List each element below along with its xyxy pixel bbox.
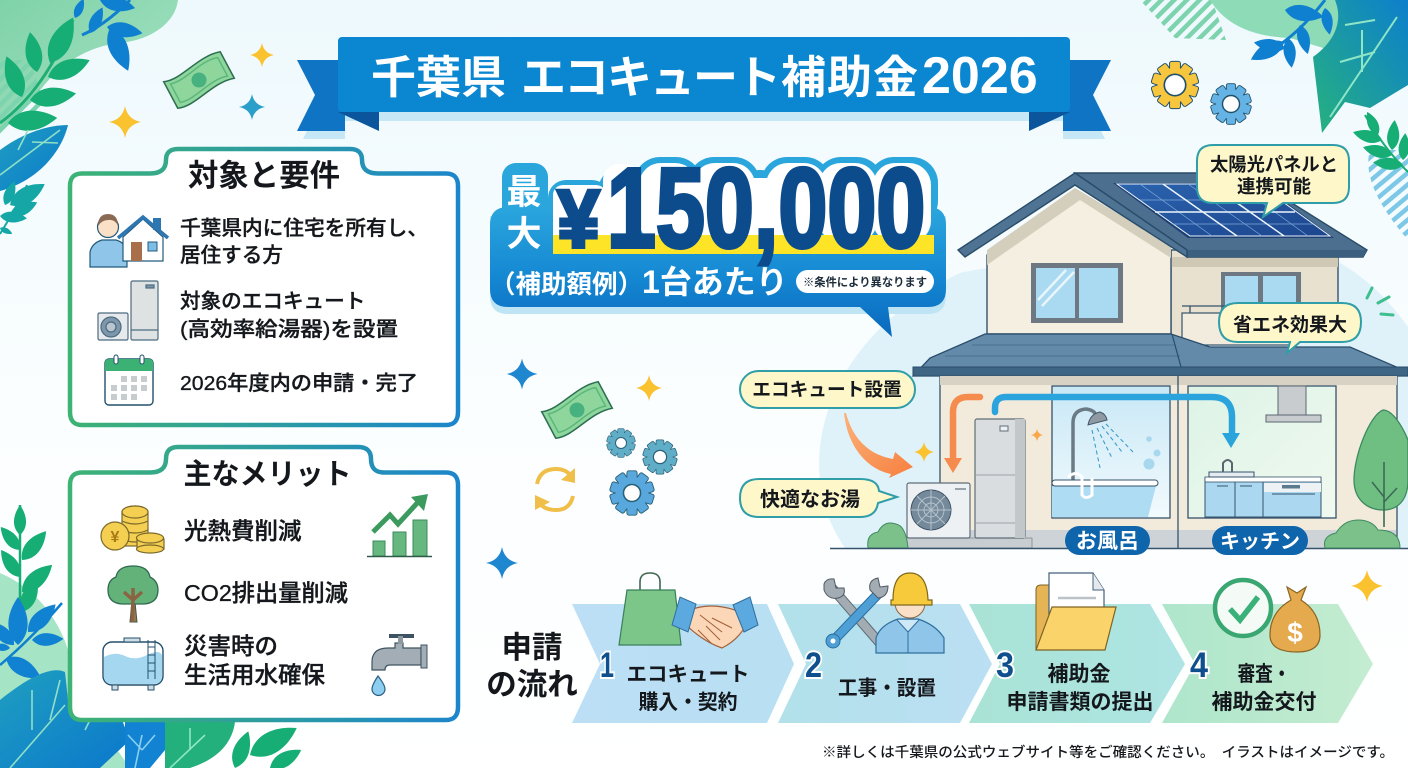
callout: 快適なお湯: 快適なお湯 (760, 488, 860, 511)
solar panel (1113, 183, 1334, 238)
outdoor unit (907, 483, 970, 538)
icon: water tank (103, 638, 163, 690)
step numbers (600, 646, 1208, 685)
title text: 2026 (922, 47, 1038, 105)
title text: 補助金 (781, 52, 919, 103)
text: 災害時の生活用水確保: 生活用水確保 (184, 662, 325, 688)
bathroom (1052, 386, 1170, 518)
text: 最大: 最 (506, 173, 542, 212)
note pill: ※条件により異なります (803, 275, 927, 289)
text: 光熱費削減: 光熱費削減 (184, 518, 302, 544)
icon: calendar (105, 355, 153, 405)
tree right (1354, 410, 1408, 527)
icon: coins: ¥ (111, 529, 120, 546)
decorative sparkles (109, 43, 1383, 602)
ground floor wall (940, 376, 1397, 548)
icon: banknote middle (541, 380, 613, 440)
balcony (1182, 306, 1300, 345)
icon: document folder (1036, 573, 1116, 650)
callout: エコキュート設置: エコキュート設置 (752, 379, 902, 400)
icon: person and house (90, 214, 168, 267)
step numbers: 4 (1190, 646, 1208, 685)
text: requirement 2: (高効率給湯器)を設置 (180, 318, 398, 341)
text: 最大: 大 (506, 215, 542, 254)
heading: 申請の流れ (486, 631, 578, 702)
icon: eco cute unit (98, 281, 158, 340)
highlight bar (553, 235, 934, 254)
icon: tools and worker (824, 573, 944, 653)
icon: tree (108, 566, 158, 622)
step numbers: 1 (600, 646, 614, 685)
text: 災害時の生活用水確保 (184, 633, 325, 688)
decoration: green ticks (1367, 288, 1393, 315)
text: 最大 (506, 173, 542, 254)
heading: 申請の流れ: 申請 (502, 631, 562, 665)
sparkles small (914, 442, 934, 462)
heading: 対象と要件: 対象と要件 (188, 159, 340, 193)
bush right (1324, 520, 1400, 548)
decoration: top-left foliage (0, 0, 178, 236)
title text: 千葉県 (371, 52, 506, 103)
pipe: hot water blue arrow (995, 397, 1240, 448)
icon: shopping bag and handshake (619, 573, 758, 648)
background circle (819, 254, 1408, 548)
step 3 text: 補助金 (1048, 663, 1110, 686)
text: requirement 1: 千葉県内に住宅を所有し、 (180, 217, 428, 240)
decoration: bottom-left foliage (0, 505, 305, 768)
icon: check and money bag (1215, 580, 1320, 652)
hot water tank (975, 419, 1025, 538)
callout: エコキュート設置 (740, 371, 915, 408)
icon: bar chart rising (367, 494, 432, 556)
callout: 快適なお湯 (740, 479, 897, 517)
step 4 text: 補助金交付 (1212, 691, 1316, 714)
step 3 text: 申請書類の提出 (1006, 691, 1154, 714)
upper gable wall (987, 190, 1171, 334)
title banner (297, 37, 1111, 139)
step 4 text: 審査・ (1238, 663, 1290, 686)
text: requirement 1 (180, 217, 428, 267)
icon: faucet (372, 636, 427, 696)
step numbers: 2 (805, 646, 822, 685)
title text: エコキュート (521, 52, 779, 103)
footnote: ※詳しくは千葉県の公式ウェブサイト等をご確認ください。 イラストはイメージです。 (822, 744, 1394, 760)
foundation base (898, 538, 1032, 548)
icon: gears top right (1152, 62, 1251, 124)
lower roof (913, 334, 1408, 376)
main roof (1075, 173, 1367, 257)
decoration: top-right foliage (1140, 0, 1408, 240)
text: per-unit label: 1台あたり (642, 264, 788, 300)
text: requirement 3: 2026年度内の申請・完了 (180, 372, 418, 395)
label: お風呂: お風呂 (1076, 530, 1139, 553)
pipe: orange arrow (944, 397, 980, 473)
step numbers: 3 (996, 646, 1014, 685)
arrow: orange to unit (844, 413, 913, 478)
text: requirement 1: 居住する方 (180, 244, 283, 267)
text: requirement 2: 対象のエコキュート (180, 290, 365, 313)
icon: coins (101, 506, 164, 553)
step 2 text: 工事・設置 (838, 677, 936, 700)
text: 災害時の生活用水確保: 災害時の (184, 633, 278, 659)
callout: 太陽光パネルと連携可能: 太陽光パネルと (1210, 154, 1338, 175)
text: requirement 2 (180, 290, 398, 341)
amount: ¥150,000: 150,000 (607, 146, 925, 272)
amount: ¥150,000: ¥ (558, 173, 600, 265)
process chevrons (572, 604, 1373, 723)
callout: 省エネ効果大 (1219, 303, 1361, 353)
note pill (796, 270, 934, 293)
small wall roof block (1171, 250, 1338, 340)
label: キッチン (1212, 526, 1308, 555)
panel: 主なメリット (70, 447, 458, 720)
callout: 省エネ効果大: 省エネ効果大 (1233, 314, 1347, 336)
callout: subsidy amount (490, 146, 946, 337)
callout: 太陽光パネルと連携可能: 連携可能 (1237, 176, 1311, 197)
icon: banknote top (163, 50, 235, 110)
callout: 太陽光パネルと連携可能 (1197, 145, 1349, 217)
step 1 text: 購入・契約 (638, 691, 738, 714)
icon: gears and cycle arrows (535, 429, 677, 515)
icon: check and money bag: $ (1287, 617, 1303, 648)
label: お風呂 (1065, 526, 1150, 555)
text: CO2排出量削減: CO2排出量削減 (184, 580, 348, 606)
heading: 主なメリット: 主なメリット (184, 458, 352, 491)
heading: 申請の流れ: の流れ (486, 668, 578, 702)
illustration: house (819, 173, 1408, 555)
text: per-unit label: （補助額例） (490, 271, 643, 299)
bush left (868, 523, 908, 548)
windows upper (1031, 263, 1301, 323)
step 3 text (1006, 663, 1154, 714)
ground line (830, 548, 1408, 550)
label: キッチン: キッチン (1220, 531, 1300, 553)
kitchen (1188, 386, 1336, 518)
step 1 text: エコキュート (626, 663, 750, 686)
step 1 text (626, 663, 750, 714)
step 4 text (1212, 663, 1316, 714)
panel: 対象と要件 (70, 149, 458, 425)
